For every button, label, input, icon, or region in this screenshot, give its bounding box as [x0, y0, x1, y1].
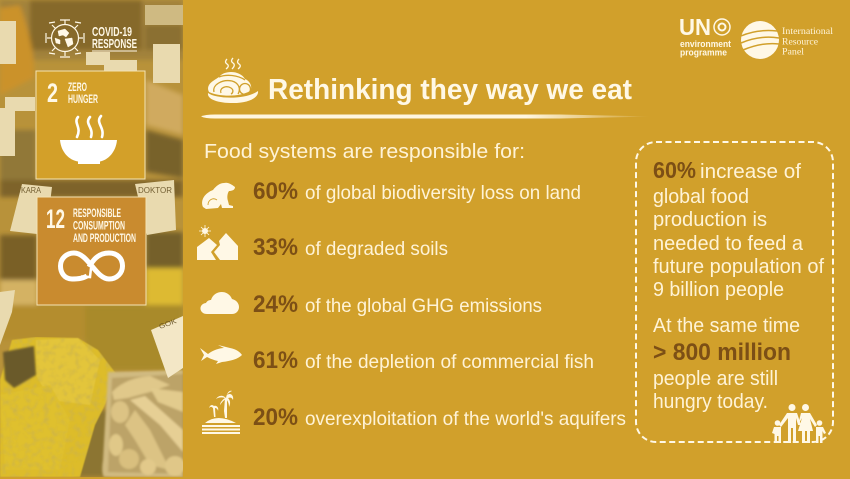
UN wordmark: UN: [679, 14, 711, 40]
stat row: biodiversity: [202, 178, 581, 209]
description: of global biodiversity loss on land: [305, 182, 581, 204]
stat row: fish: [200, 345, 594, 374]
description: of degraded soils: [305, 238, 448, 260]
rule: [201, 114, 652, 118]
panel name: International: [782, 27, 833, 37]
programme name: programme: [680, 48, 727, 58]
logo: International Resource Panel: [741, 21, 833, 59]
stat row: soils: [197, 225, 448, 261]
handwritten label: KARA: [21, 186, 42, 195]
goal name: ZERO: [68, 80, 87, 94]
programme name: environment: [680, 39, 731, 49]
description: of the depletion of commercial fish: [305, 351, 594, 373]
callout: food production and hunger: [636, 142, 833, 443]
percentage: 24%: [253, 291, 298, 318]
goal name: RESPONSIBLE: [73, 208, 121, 220]
goal number: 12: [46, 204, 65, 234]
callout text: food production: 60%: [653, 157, 696, 183]
panel name: Panel: [782, 48, 804, 58]
callout text: hunger: > 800 million: [653, 339, 791, 366]
yellow grain mound: [0, 337, 117, 477]
programme name: [680, 39, 731, 58]
intro text: Food systems are responsible for:: [204, 141, 525, 163]
icon: striped globe: [741, 21, 779, 59]
description: of the global GHG emissions: [305, 295, 542, 317]
icon: virus globe: [46, 20, 84, 57]
percentage: 60%: [253, 178, 298, 205]
icon: noodle plate with steam: [208, 58, 258, 103]
goal name: [73, 208, 136, 245]
callout text: food production: 9 billion people: [653, 279, 784, 301]
callout text: hunger: At the same time: [653, 315, 800, 337]
icon: palm island with waves: [202, 391, 240, 434]
handwritten label: GOK: [158, 318, 178, 331]
stat row: aquifers: [202, 391, 626, 434]
percentage: 61%: [253, 347, 298, 374]
percentage: 20%: [253, 404, 298, 431]
SDG 12 card: responsible consumption and production: [37, 197, 146, 305]
callout text: food production: global food: [653, 186, 749, 208]
price labels: [0, 5, 183, 378]
callout text: food production: production is: [653, 209, 767, 231]
percentage: 33%: [253, 234, 298, 261]
badge label: COVID-19: [92, 24, 132, 39]
title block: [201, 58, 652, 118]
goal name: AND PRODUCTION: [73, 233, 136, 245]
callout text: food production: needed to feed a: [653, 233, 804, 255]
callout text: hunger: [653, 315, 800, 413]
icon: cloud: [200, 292, 239, 314]
callout text: hunger: people are still: [653, 368, 778, 390]
handwritten label: DOKTOR: [138, 186, 172, 195]
photo panel: market spice sacks: [0, 0, 185, 477]
COVID-19 response badge: [46, 20, 137, 57]
panel name: Resource: [782, 38, 818, 48]
heading: Rethinking they way we eat: [268, 74, 632, 106]
callout text: hunger: hungry today.: [653, 391, 768, 413]
icon: steaming bowl: [60, 116, 117, 164]
goal name: [68, 80, 98, 106]
stat row: emissions: [200, 291, 542, 318]
description: overexploitation of the world's aquifers: [305, 408, 626, 430]
goal name: HUNGER: [68, 92, 98, 106]
icon: fish: [200, 345, 242, 364]
badge label: RESPONSE: [92, 36, 137, 51]
badge label: [92, 24, 137, 52]
callout text: food production: increase of: [700, 161, 801, 183]
logo: UN environment programme: [679, 14, 731, 58]
icon: family: [772, 404, 826, 443]
callout text: food production: [653, 157, 824, 301]
SDG 2 card: zero hunger: [36, 71, 145, 179]
icon: frog: [202, 183, 235, 209]
callout text: food production: future population of: [653, 256, 824, 278]
tray of ginger: [102, 370, 185, 477]
icon: UN emblem: [714, 19, 730, 35]
icon: sun over cracked mountains: [197, 225, 238, 260]
goal number: 2: [47, 78, 58, 108]
goal name: CONSUMPTION: [73, 220, 125, 232]
icon: infinity loop: [60, 253, 122, 279]
panel name: [782, 27, 833, 58]
